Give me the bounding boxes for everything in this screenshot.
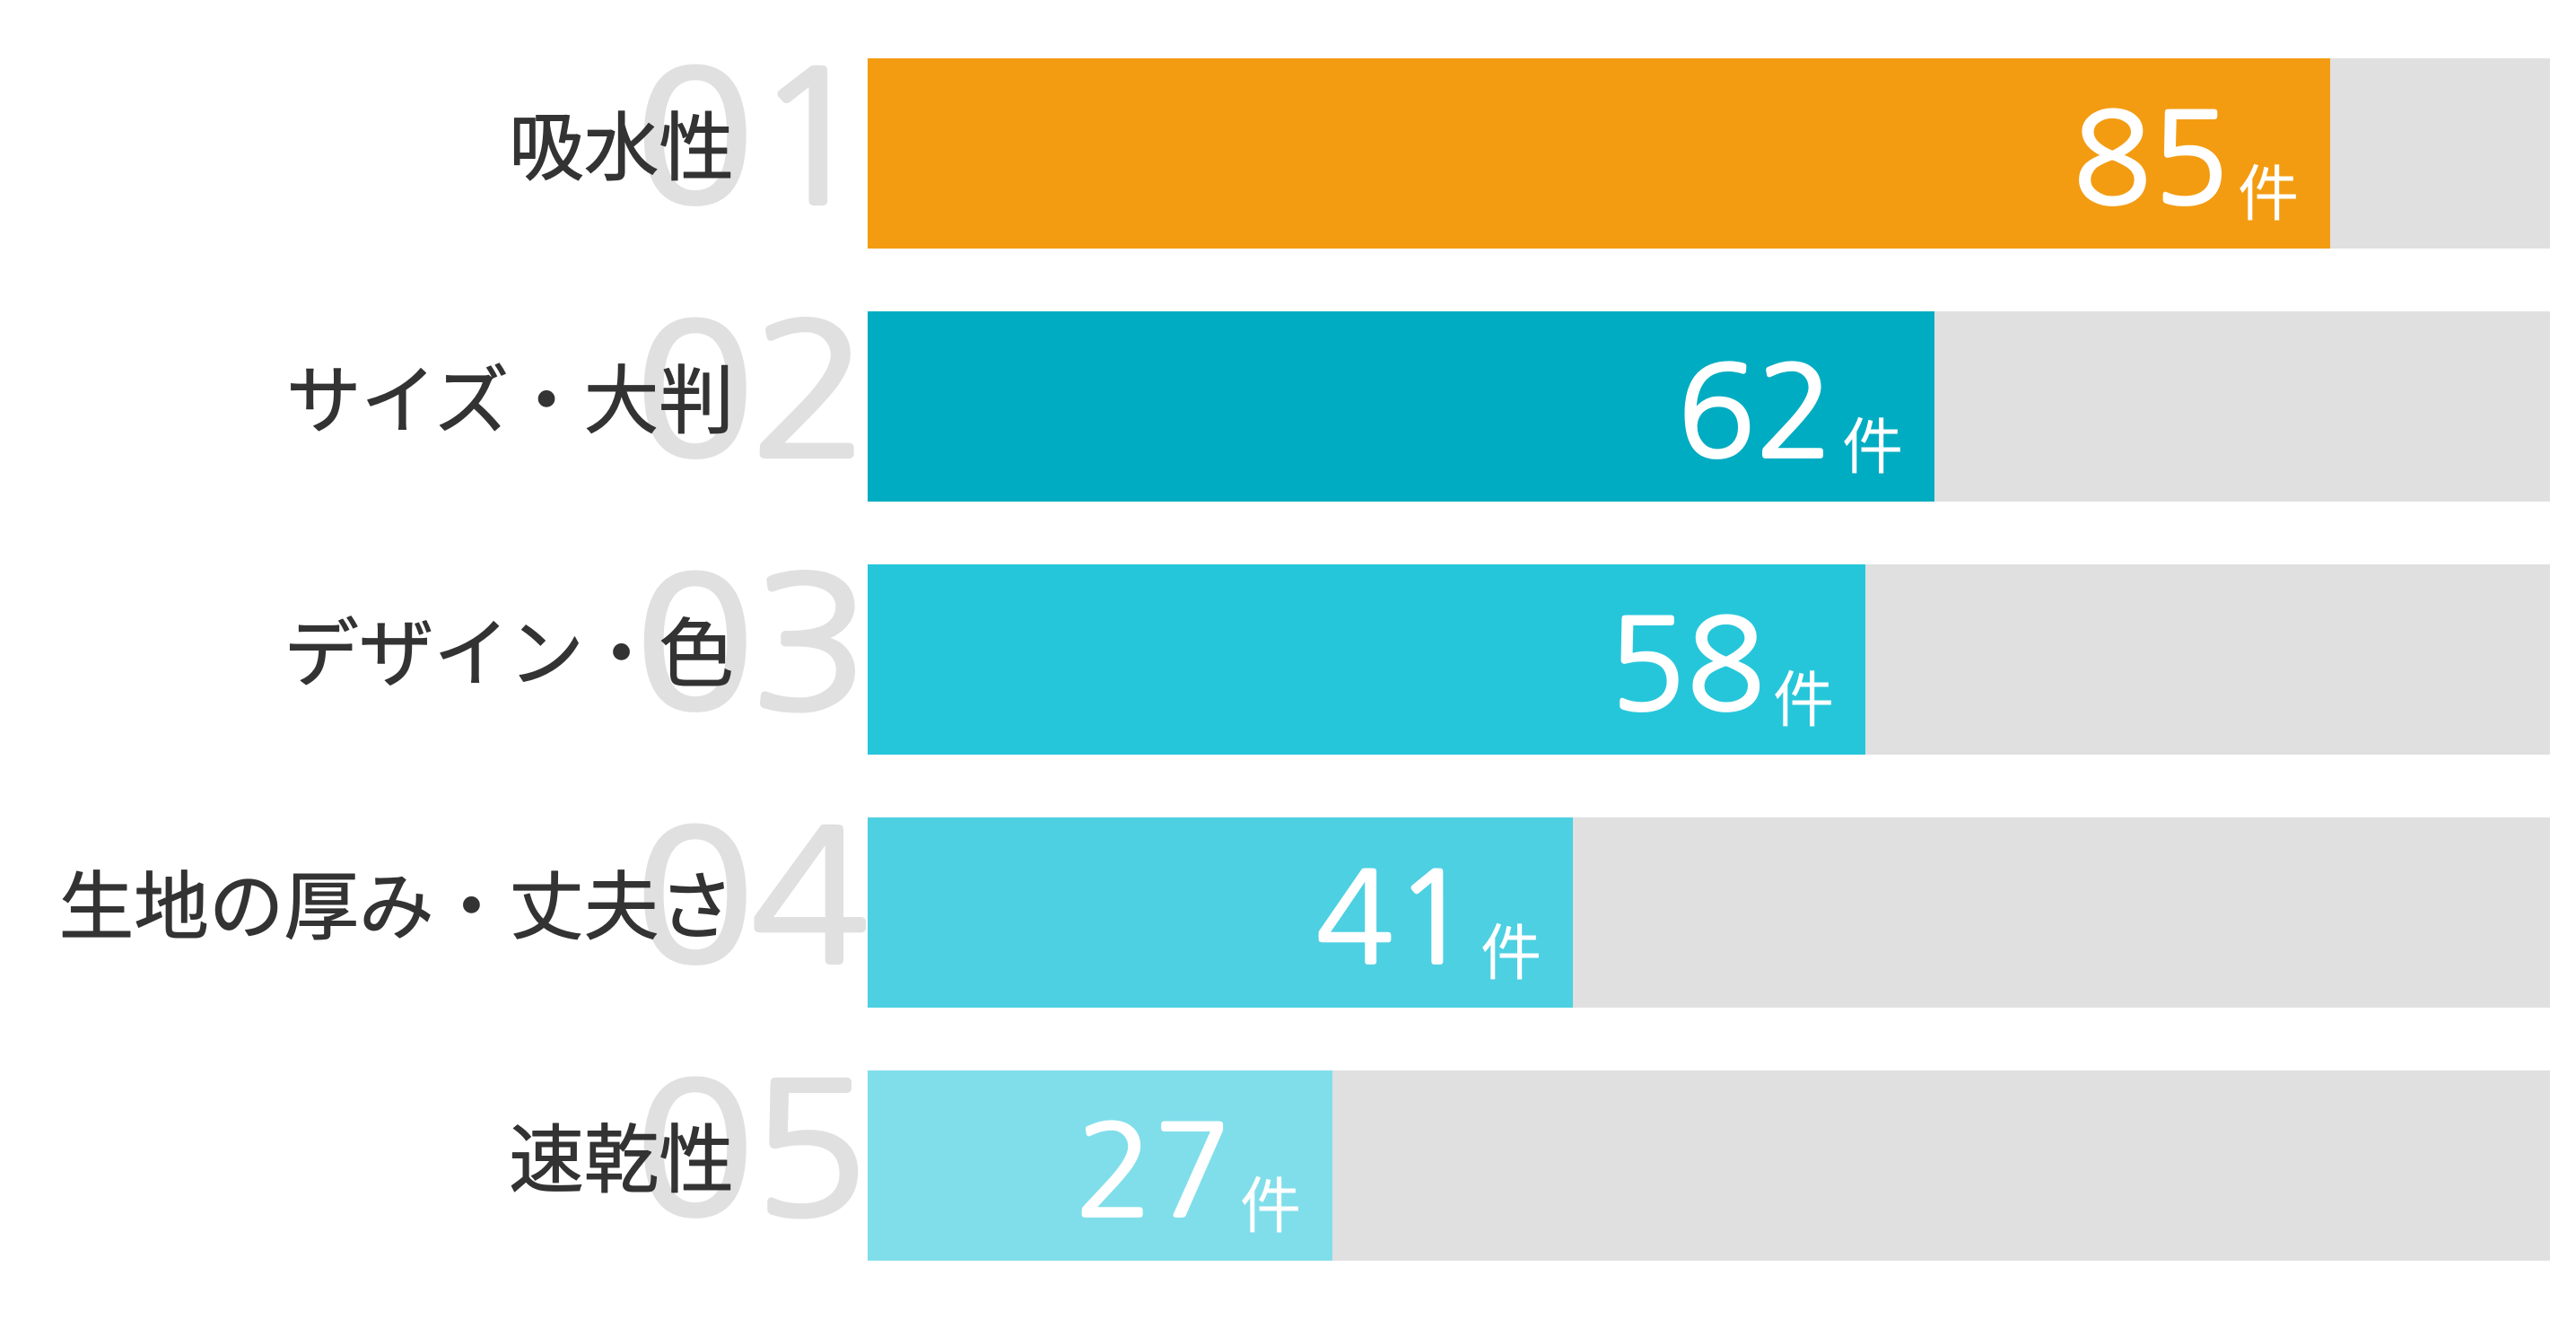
rank number 02: 0 <box>634 300 755 483</box>
rank number 05: 0 <box>634 1059 755 1242</box>
bar track <box>868 817 2550 1008</box>
value: 58 <box>1608 603 1765 729</box>
rank number 02: 2 <box>750 300 870 483</box>
unit: 件 <box>1480 904 1541 992</box>
value: 27 <box>1075 1109 1232 1235</box>
bar fill <box>868 311 1934 502</box>
rank number 05: 5 <box>750 1059 870 1242</box>
value: 41 <box>1315 856 1472 982</box>
value: 85 <box>2073 97 2230 223</box>
bar fill <box>868 564 1865 755</box>
bar track <box>868 564 2550 755</box>
rank number 01: 1 <box>752 47 872 230</box>
row 02: size <box>286 300 2550 502</box>
bar track <box>868 311 2550 502</box>
bar fill <box>868 817 1573 1008</box>
row 05: quick drying <box>509 1059 2550 1261</box>
rank number 04: 0 <box>634 806 755 989</box>
rank number 03: 0 <box>634 553 755 736</box>
rank number 03: 3 <box>750 553 870 736</box>
unit: 件 <box>1842 397 1903 486</box>
rank number 04: 4 <box>750 806 870 989</box>
unit: 件 <box>1240 1157 1301 1245</box>
rank number 01: 0 <box>634 47 755 230</box>
bar fill <box>868 58 2330 249</box>
value: 62 <box>1677 350 1834 476</box>
unit: 件 <box>1773 651 1834 739</box>
row 04: fabric <box>59 806 2550 1008</box>
label: デザイン・色 <box>284 594 734 703</box>
label: サイズ・大判 <box>286 341 734 450</box>
row 01: absorbency <box>509 47 2550 249</box>
label: 速乾性 <box>509 1100 734 1209</box>
unit: 件 <box>2238 144 2299 233</box>
row 03: design <box>284 553 2550 755</box>
bar track <box>868 58 2550 249</box>
label: 吸水性 <box>509 88 734 197</box>
bar track <box>868 1070 2550 1261</box>
label: 生地の厚み・丈夫さ <box>59 847 734 956</box>
bar fill <box>868 1070 1332 1261</box>
